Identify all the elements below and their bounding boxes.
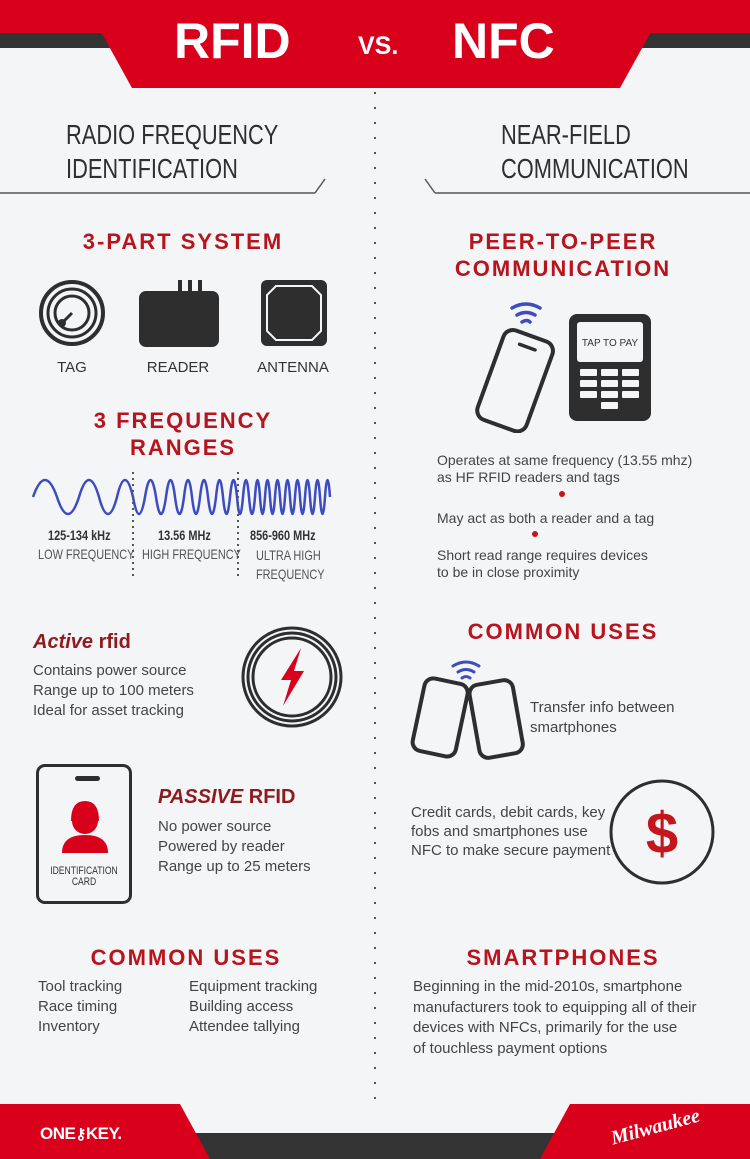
- subtitle left: [66, 119, 278, 184]
- frequency labels: ULTRA HIGH: [256, 547, 321, 563]
- icon: identification card: [36, 764, 132, 904]
- icon: phone tapping terminal: [475, 302, 651, 433]
- heading: frequency ranges: 3 FREQUENCY: [94, 408, 272, 433]
- text: payments: Credit cards, debit cards, key: [411, 804, 605, 821]
- frequency labels: LOW FREQUENCY: [38, 546, 134, 562]
- icon: dollar circle: [610, 780, 714, 884]
- text: passive rfid: Range up to 25 meters: [158, 858, 311, 875]
- icon: identification card: IDENTIFICATION: [50, 865, 118, 877]
- title: [174, 13, 555, 69]
- text: transfer info: [530, 699, 675, 736]
- frequency labels: 856-960 MHz: [250, 527, 316, 543]
- text: active rfid: Range up to 100 meters: [33, 682, 194, 699]
- text: active rfid: Ideal for asset tracking: [33, 702, 184, 719]
- title: RFID: [174, 13, 291, 69]
- heading: frequency ranges: RANGES: [130, 435, 236, 460]
- text: transfer info: Transfer info between: [530, 699, 675, 716]
- icon: identification card: CARD: [72, 876, 96, 888]
- list: rfid uses: Building access: [189, 998, 293, 1015]
- text: nfc facts: May act as both a reader and a tag: [437, 510, 654, 526]
- text: active rfid: Active rfid: [33, 631, 131, 653]
- icon: reader: [139, 280, 219, 347]
- frequency labels: HIGH FREQUENCY: [142, 546, 241, 562]
- text: nfc facts: to be in close proximity: [437, 564, 579, 580]
- chart: frequency wave: [32, 472, 332, 576]
- text: payments: fobs and smartphones use: [411, 823, 588, 840]
- text: nfc facts: Short read range requires devices: [437, 547, 648, 563]
- subtitle right: COMMUNICATION: [501, 153, 689, 184]
- header banner: [0, 0, 750, 194]
- text: passive rfid: PASSIVE RFID: [158, 786, 295, 808]
- heading: peer to peer: [455, 229, 671, 281]
- text: smartphones: [413, 978, 696, 1056]
- heading: peer to peer: COMMUNICATION: [455, 256, 671, 281]
- icon: active power circle: [242, 626, 342, 728]
- label: reader: READER: [147, 359, 209, 376]
- title: NFC: [452, 13, 555, 69]
- title: VS.: [358, 32, 398, 60]
- icon: dollar circle: $: [646, 801, 678, 866]
- text: transfer info: smartphones: [530, 719, 617, 736]
- text: nfc facts: as HF RFID readers and tags: [437, 469, 620, 485]
- footer: [0, 1104, 750, 1159]
- label: antenna: ANTENNA: [257, 359, 329, 376]
- icon: tag: [39, 280, 105, 346]
- icon: two phones: [410, 660, 525, 760]
- text: payments: NFC to make secure payment: [411, 842, 610, 859]
- heading: peer to peer: PEER-TO-PEER: [469, 229, 657, 254]
- label: tag: TAG: [57, 359, 87, 376]
- text: passive rfid: No power source: [158, 818, 271, 835]
- text: active rfid: Contains power source: [33, 662, 186, 679]
- logo: milwaukee: Milwaukee: [609, 1105, 702, 1149]
- text: smartphones: manufacturers took to equipping all of their: [413, 998, 696, 1016]
- frequency labels: 125-134 kHz: [48, 527, 111, 543]
- center dotted divider: [374, 92, 376, 1099]
- text: payments: [411, 804, 610, 859]
- text: smartphones: Beginning in the mid-2010s, smartphone: [413, 978, 682, 995]
- text: active rfid: [32, 631, 194, 719]
- text: passive rfid: [158, 786, 311, 875]
- text: nfc facts: [437, 452, 692, 580]
- heading: 3-part system: 3-PART SYSTEM: [83, 229, 283, 254]
- subtitle right: [501, 119, 689, 184]
- list: rfid uses: Tool tracking: [38, 978, 122, 995]
- heading: common uses right: COMMON USES: [468, 619, 658, 644]
- heading: common uses left: COMMON USES: [91, 945, 281, 970]
- list: rfid uses: Race timing: [38, 998, 117, 1015]
- frequency labels: 13.56 MHz: [158, 527, 211, 543]
- text: smartphones: of touchless payment options: [413, 1040, 607, 1056]
- list: rfid uses: Attendee tallying: [189, 1018, 300, 1035]
- list: rfid uses: Equipment tracking: [189, 978, 317, 995]
- text: nfc facts: Operates at same frequency (13.55 mhz): [437, 452, 692, 468]
- heading: frequency ranges: [94, 408, 272, 460]
- heading: smartphones: SMARTPHONES: [466, 945, 660, 970]
- logo: one key: ONE⚷KEY.: [40, 1124, 122, 1143]
- subtitle right: NEAR-FIELD: [501, 119, 631, 150]
- list: rfid uses: Inventory: [38, 1018, 100, 1035]
- text: passive rfid: Powered by reader: [158, 838, 285, 855]
- text: smartphones: devices with NFCs, primarily for the use: [413, 1019, 677, 1036]
- icon: phone tapping terminal: TAP TO PAY: [582, 338, 638, 349]
- frequency labels: [38, 527, 325, 582]
- icon: antenna: [261, 280, 327, 346]
- frequency labels: FREQUENCY: [256, 566, 325, 582]
- list: rfid uses: [38, 978, 317, 1035]
- subtitle left: RADIO FREQUENCY: [66, 119, 278, 150]
- subtitle left: IDENTIFICATION: [66, 153, 238, 184]
